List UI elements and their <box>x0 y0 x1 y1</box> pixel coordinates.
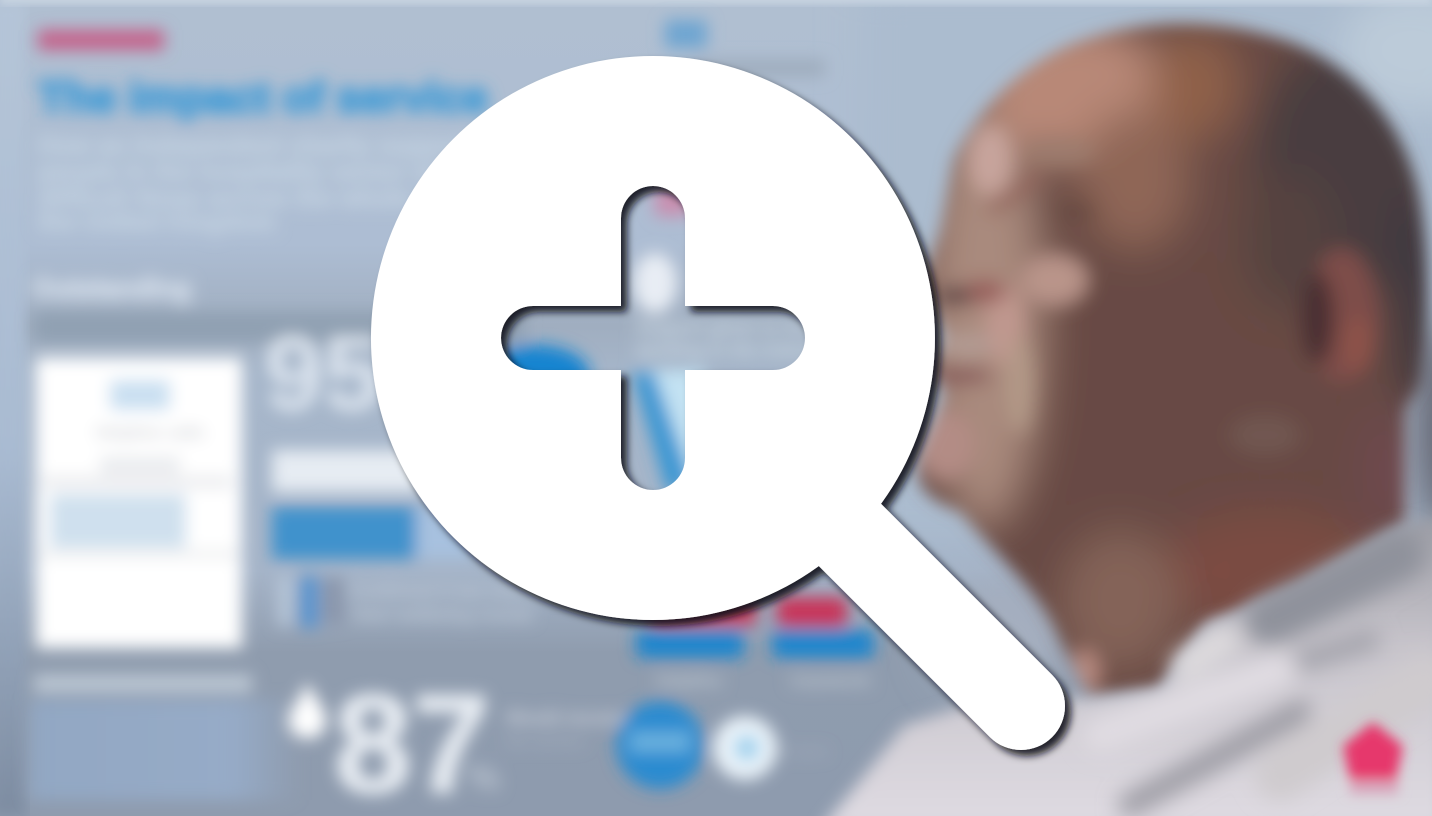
category tag <box>38 30 164 50</box>
photo: chef in profile <box>820 0 1432 816</box>
title: The impact of service <box>38 73 488 122</box>
top grey band <box>690 60 825 76</box>
intro text: difficult times across the whole of <box>38 184 442 212</box>
white sub heading <box>272 450 422 492</box>
logo star <box>1343 722 1403 780</box>
magnifier lens with plus cut-out <box>371 56 935 620</box>
card label <box>110 380 170 410</box>
central text: Support given to those <box>636 317 832 337</box>
pink pill left <box>650 598 756 626</box>
content layer <box>30 20 874 816</box>
top pink mark <box>655 186 690 216</box>
magnifying glass icon <box>371 56 1021 706</box>
intro text: people in the hospitality sector during <box>38 158 491 186</box>
caption right: Casework <box>790 671 871 690</box>
section band <box>34 312 524 342</box>
intro text <box>38 132 491 236</box>
card row <box>100 456 180 474</box>
small stat text <box>350 581 565 624</box>
big number 95: 95 <box>264 315 382 433</box>
sub heading lower <box>34 675 252 692</box>
card divider <box>40 551 240 557</box>
central text: working in the industry <box>635 340 834 360</box>
central icon <box>633 253 677 313</box>
donut streak <box>632 372 692 495</box>
stat text: the service <box>506 733 584 750</box>
icon: drop <box>289 682 326 738</box>
pink pill right <box>777 597 847 627</box>
donut highlight <box>640 370 705 480</box>
pale circle <box>713 716 777 780</box>
central text <box>635 317 834 360</box>
small stat icons <box>278 576 344 628</box>
chef white jacket <box>820 515 1432 816</box>
circle caption: of users <box>778 743 828 759</box>
top edge highlight <box>0 0 1432 4</box>
small stat text: their wellbeing overall <box>354 605 533 624</box>
intro text: How an independent charity supports <box>38 132 485 160</box>
card table <box>50 494 186 548</box>
blue arc left <box>480 345 590 405</box>
jacket folds <box>1100 555 1425 805</box>
magnifier handle <box>850 535 1021 706</box>
card text: Helpline calls <box>96 423 205 442</box>
blue banner <box>272 507 476 559</box>
card grey strip <box>42 476 232 488</box>
blue pill left <box>636 630 744 658</box>
large blue circle <box>616 701 704 789</box>
stat text: Would recomm <box>506 708 636 728</box>
logo: pink house mark <box>1343 722 1403 794</box>
caption left: Helpline <box>656 671 722 690</box>
left panel edge strip <box>0 0 26 816</box>
blue pill right <box>772 630 874 658</box>
stat text <box>506 708 636 750</box>
percent sign: % <box>468 757 500 798</box>
intro text: the United Kingdom <box>38 208 275 236</box>
small stat text: Confirmed it has improved <box>350 581 565 600</box>
logo lower fade <box>1350 768 1398 794</box>
top blue tag <box>665 20 707 48</box>
chef head and neck <box>900 0 1432 720</box>
section heading: Outstanding <box>32 273 191 303</box>
photo backdrop <box>860 0 1432 700</box>
lower left panel <box>30 700 300 800</box>
white card <box>36 358 242 648</box>
